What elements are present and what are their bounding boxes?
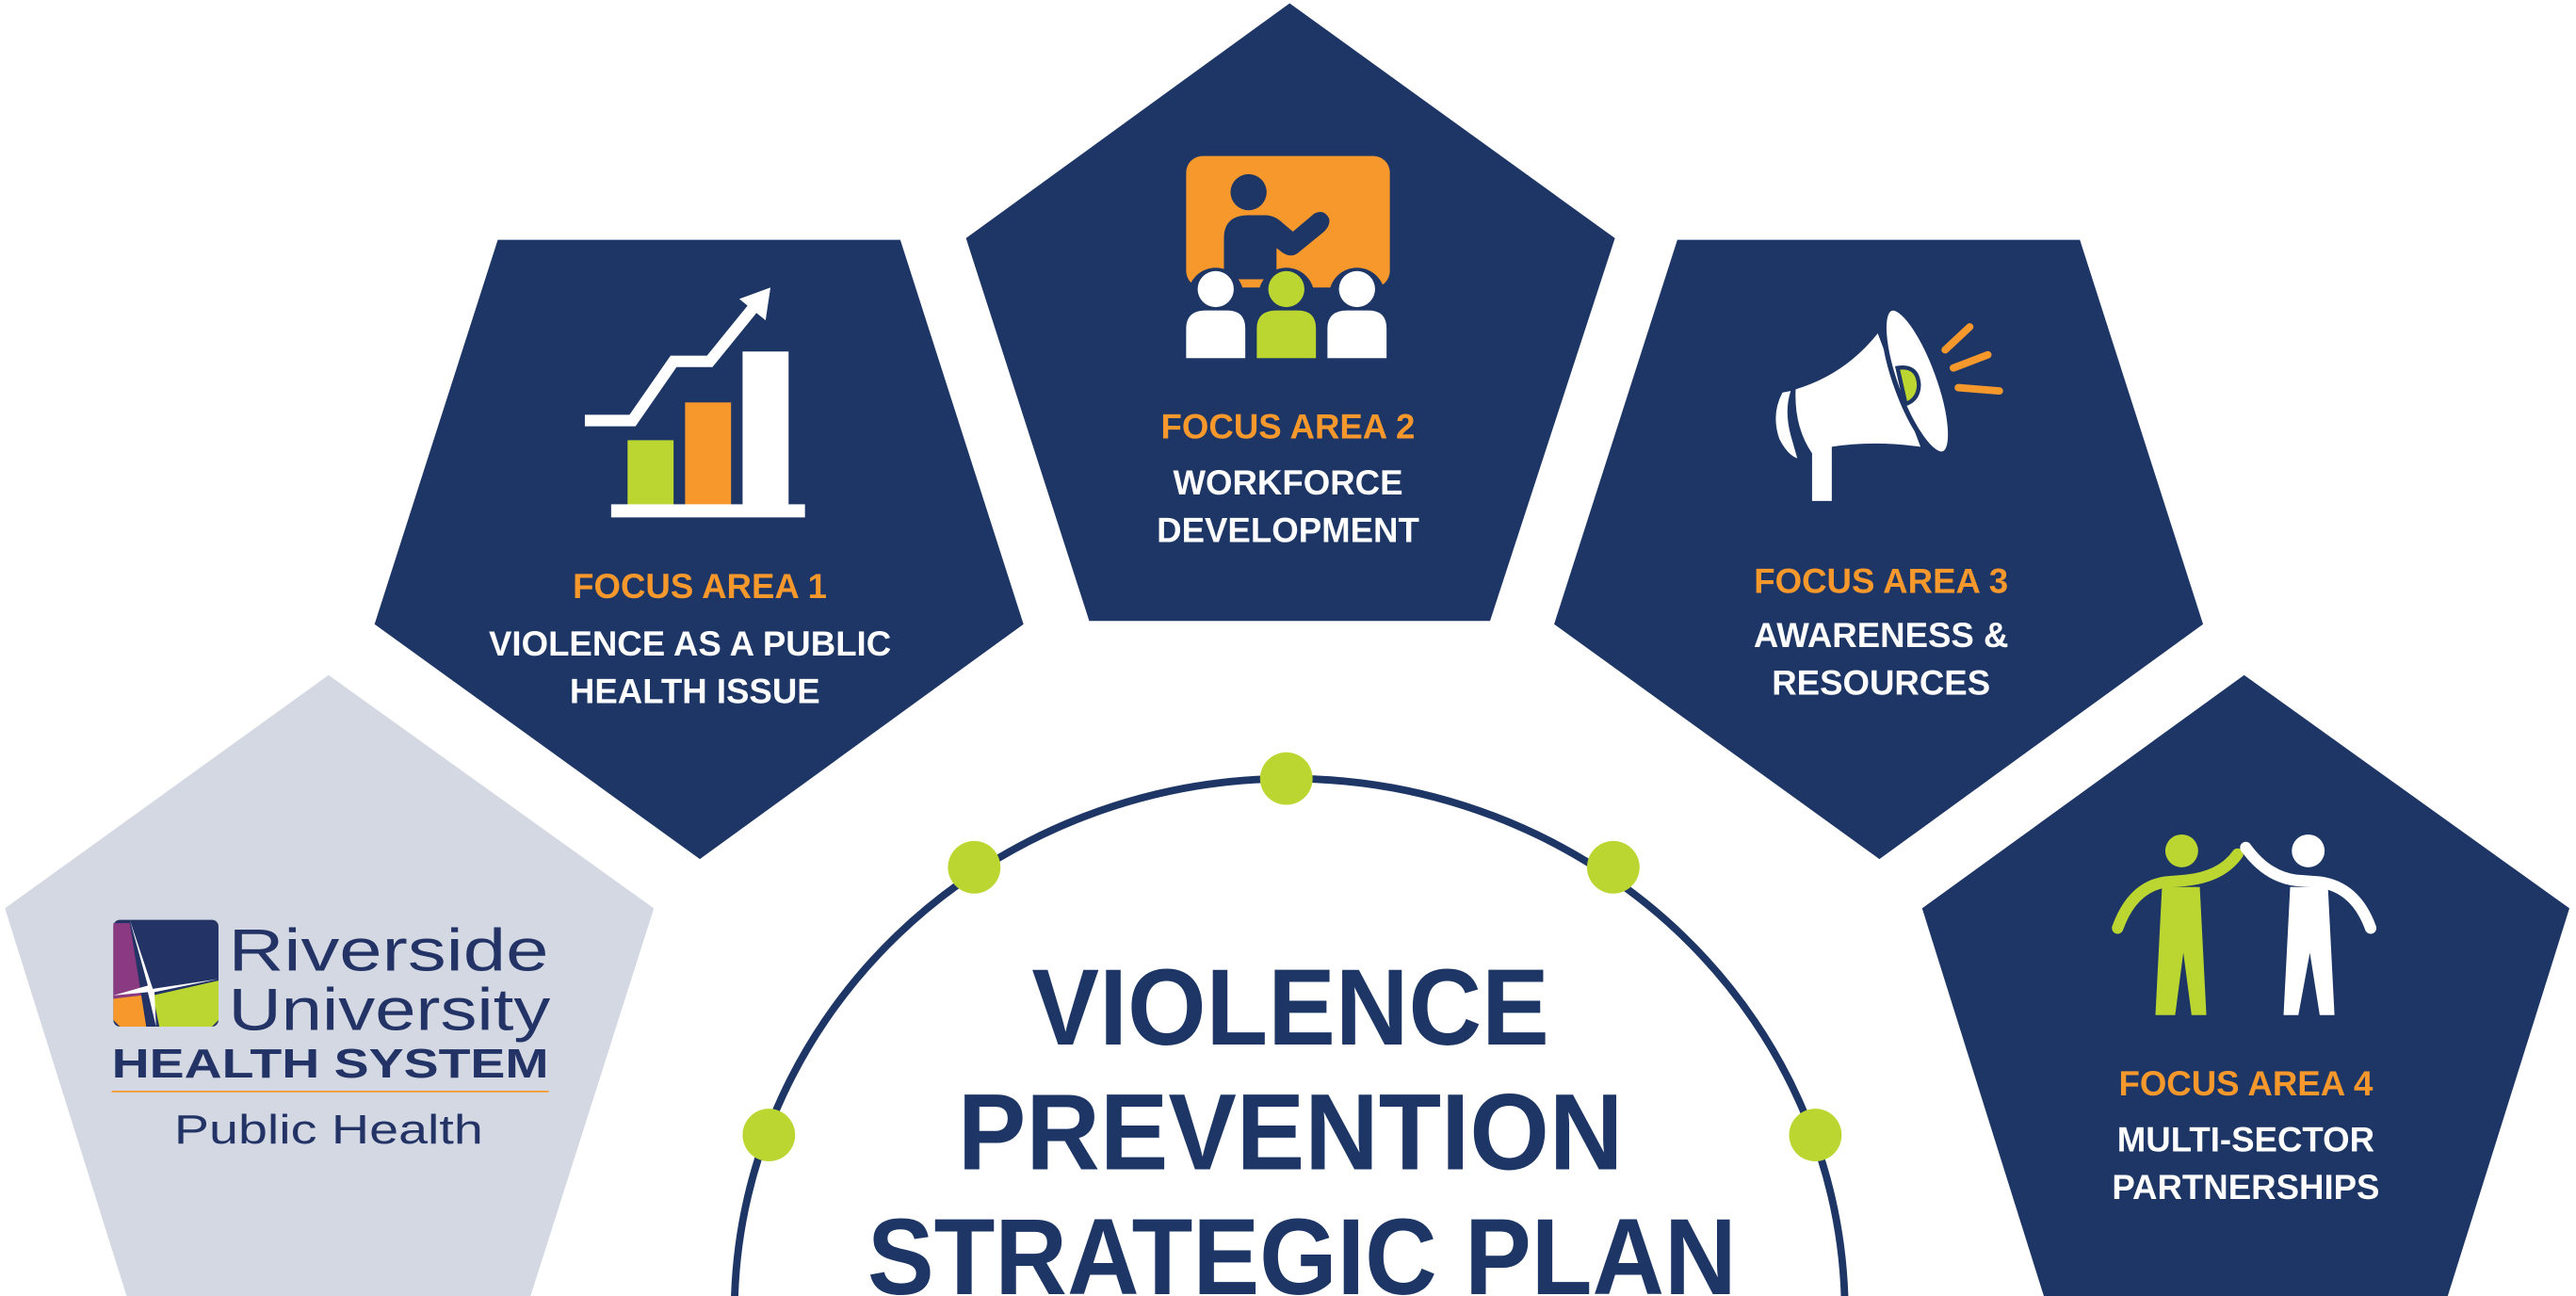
- logo text: HEALTH SYSTEM: [112, 1042, 549, 1087]
- text: focus area 4: FOCUS AREA 4: [2118, 1064, 2373, 1103]
- text: focus area 1: [489, 567, 891, 710]
- arc with dots: [735, 753, 1845, 1296]
- logo mark: [113, 920, 219, 1027]
- text: focus area 4: [2112, 1064, 2379, 1207]
- panel: logo pentagon: [5, 675, 654, 1296]
- text: focus area 3: RESOURCES: [1772, 664, 1990, 703]
- text: focus area 4: MULTI-SECTOR: [2117, 1121, 2374, 1159]
- text: focus area 3: AWARENESS &: [1754, 616, 2008, 655]
- text: focus area 2: DEVELOPMENT: [1157, 511, 1419, 550]
- text: focus area 1: FOCUS AREA 1: [573, 567, 827, 606]
- panel: focus area 4: [1922, 675, 2569, 1296]
- text: focus area 3: [1754, 562, 2008, 703]
- panel: focus area 1: [375, 240, 1024, 859]
- text: focus area 2: FOCUS AREA 2: [1161, 408, 1415, 446]
- text: focus area 1: VIOLENCE AS A PUBLIC: [489, 624, 891, 663]
- icon: two people high five: [2117, 834, 2371, 1015]
- icon: bar chart with rising arrow: [585, 287, 805, 517]
- logo text: Riverside: [228, 918, 549, 984]
- panel: focus area 3: [1554, 240, 2203, 859]
- logo text: University: [228, 977, 551, 1043]
- logo text: Public Health: [174, 1108, 483, 1153]
- icon: teacher with students: [1186, 156, 1390, 358]
- text: focus area 4: PARTNERSHIPS: [2112, 1168, 2379, 1207]
- title: PREVENTION: [958, 1073, 1623, 1193]
- text: focus area 3: FOCUS AREA 3: [1754, 562, 2008, 601]
- logo text: [112, 918, 551, 1153]
- text: focus area 1: HEALTH ISSUE: [570, 672, 820, 710]
- title: VIOLENCE: [1031, 948, 1549, 1068]
- text: focus area 2: [1157, 408, 1419, 550]
- panel: focus area 2: [966, 3, 1615, 621]
- title: [867, 948, 1737, 1296]
- text: focus area 2: WORKFORCE: [1173, 463, 1403, 502]
- icon: megaphone: [1775, 301, 2000, 501]
